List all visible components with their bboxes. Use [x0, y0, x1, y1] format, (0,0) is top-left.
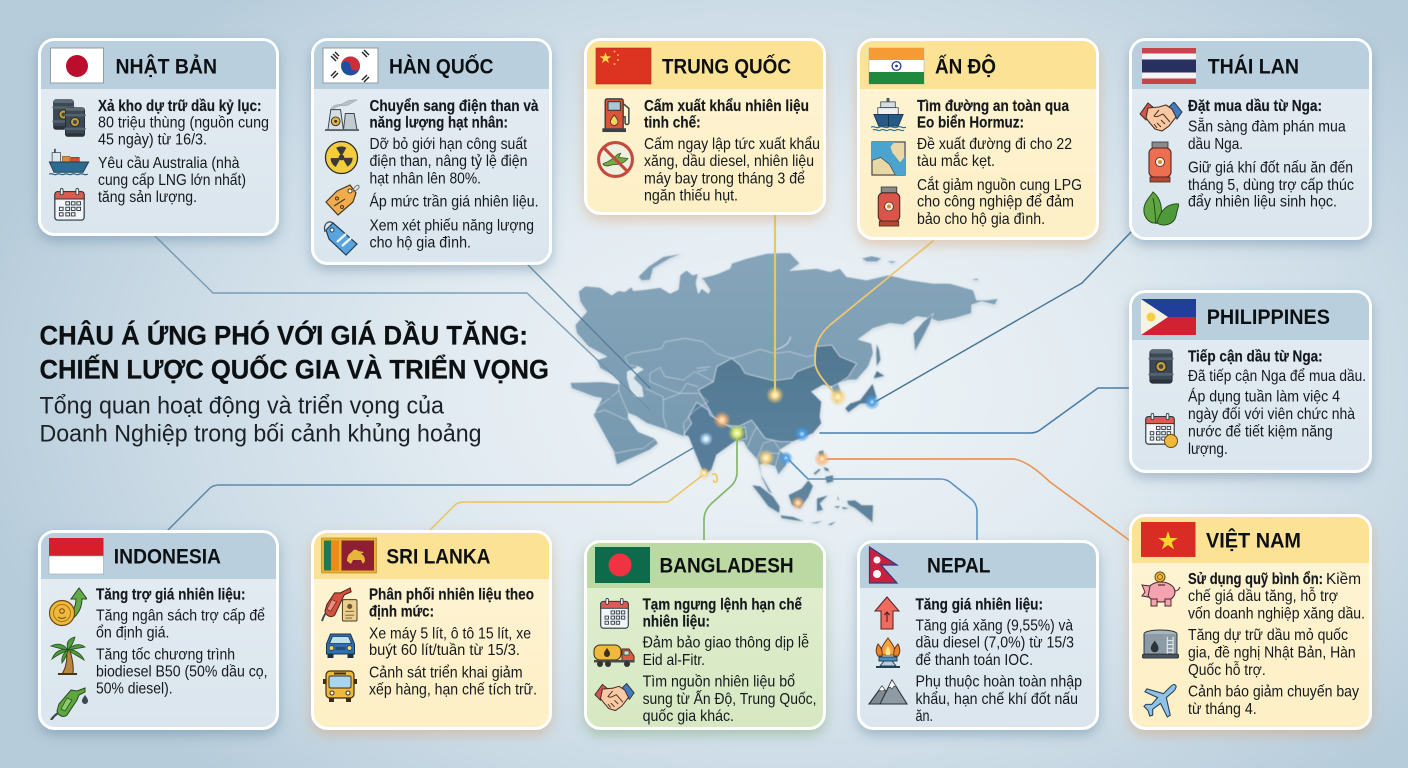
icon: car — [326, 634, 354, 658]
panel: Bangladesh — [586, 542, 824, 728]
text: Xe máy 5 lít, ô tô 15 lít, xe — [369, 625, 531, 642]
icon: palm tree — [51, 637, 85, 675]
text: Cảnh báo giảm chuyến bay — [1188, 684, 1359, 701]
panel: Việt Nam — [1130, 516, 1370, 728]
text: tàu mắc kẹt. — [917, 151, 995, 170]
icon: bus — [323, 671, 357, 702]
text: tăng sản lượng. — [98, 189, 197, 206]
text: Cấm ngay lập tức xuất khẩu — [644, 135, 820, 153]
icon: calendar — [601, 598, 628, 628]
line: Ấn Độ — [815, 241, 933, 395]
text: Sẵn sàng đàm phán mua — [1188, 117, 1346, 136]
text: Xem xét phiếu năng lượng — [370, 218, 534, 235]
icon: fuel truck — [594, 645, 634, 667]
marker: Japan — [864, 394, 880, 410]
icon: leaves — [1144, 192, 1179, 225]
marker: Indonesia — [791, 496, 805, 510]
text: Tạm ngưng lệnh hạn chế — [643, 596, 802, 613]
title: CHIẾN LƯỢC QUỐC GIA VÀ TRIỂN VỌNG — [40, 352, 549, 384]
marker: India — [699, 432, 713, 446]
text: Áp dụng tuần làm việc 4 — [1188, 387, 1340, 406]
text: hạt nhân lên 80%. — [370, 170, 481, 187]
icon: handshake — [595, 684, 634, 711]
text: nhiên liệu: — [643, 614, 710, 631]
panel: Sri Lanka — [312, 532, 550, 728]
text: Đặt mua dầu từ Nga: — [1188, 98, 1322, 115]
flag: Philippines — [1141, 299, 1196, 335]
text: ngày đối với viên chức nhà — [1188, 406, 1355, 423]
panel: Nhật Bản — [40, 40, 278, 234]
text: Đề xuất đường đi cho 22 — [917, 136, 1072, 153]
Sakhalin — [876, 343, 881, 367]
icon: nozzle and ID card — [322, 588, 357, 621]
icon: storage tank — [1142, 630, 1179, 658]
subtitle — [40, 392, 482, 448]
icon: oil barrel — [1149, 350, 1173, 383]
flag: South Korea — [323, 48, 378, 83]
text: ngăn thiếu hụt. — [644, 188, 738, 205]
icon: handshake — [1140, 102, 1182, 131]
text: quốc gia khác. — [643, 708, 734, 725]
text: buýt 60 lít/tuần từ 15/3. — [369, 642, 520, 659]
text — [1188, 98, 1354, 211]
text: tinh chế: — [644, 115, 701, 132]
line: Sri Lanka — [430, 475, 703, 530]
flag: Indonesia — [49, 538, 104, 574]
text: Áp mức trần giá nhiên liệu. — [370, 192, 538, 211]
heading: THÁI LAN — [1208, 56, 1299, 79]
text: từ tháng 4. — [1188, 701, 1257, 718]
line: Nhật Bản — [155, 236, 650, 410]
heading: PHILIPPINES — [1207, 306, 1330, 329]
title: CHÂU Á ỨNG PHÓ VỚI GIÁ DẦU TĂNG: — [40, 319, 528, 350]
heading: VIỆT NAM — [1206, 528, 1301, 552]
text: nước để tiết kiệm năng — [1188, 423, 1333, 441]
text: định mức: — [369, 604, 434, 621]
subtitle: Tổng quan hoạt động và triển vọng của — [40, 392, 445, 419]
flag: Thailand — [1142, 48, 1196, 84]
Kamchatka — [913, 313, 933, 352]
icon: oil barrels — [52, 100, 86, 136]
text: 50% diesel). — [96, 680, 173, 697]
icon: radiation — [325, 141, 358, 174]
Sulawesi — [817, 495, 828, 512]
heading: ẤN ĐỘ — [935, 55, 996, 79]
heading: HÀN QUỐC — [389, 55, 494, 79]
text: Tìm đường an toàn qua — [917, 98, 1069, 115]
marker: Hong Kong — [794, 426, 810, 442]
marker: Sri Lanka island — [712, 474, 717, 482]
text: cho hộ gia đình. — [370, 234, 471, 251]
text: máy bay trong tháng 3 để — [644, 169, 805, 187]
line: Hàn Quốc — [528, 265, 650, 388]
text: khẩu, hạn chế khí đốt nấu — [916, 690, 1078, 708]
flag: India — [869, 48, 924, 84]
Arctic islands — [862, 256, 979, 281]
subtitle: Doanh Nghiệp trong bối cảnh khủng hoảng — [40, 421, 482, 448]
Novaya Zemlya — [638, 253, 683, 281]
heading: NEPAL — [927, 555, 991, 578]
country borders — [593, 338, 815, 467]
text — [369, 586, 537, 698]
marker: Vietnam — [779, 451, 793, 465]
icon: mountains — [869, 680, 907, 704]
text: lượng. — [1188, 441, 1228, 458]
text: 45 ngày) từ 16/3. — [98, 131, 207, 148]
China highlight — [698, 345, 857, 442]
text: Phân phối nhiên liệu theo — [369, 586, 534, 603]
text: Cảnh sát triển khai giảm — [369, 663, 523, 681]
icon: gas cylinder — [1149, 142, 1171, 182]
panel: Indonesia — [40, 532, 278, 728]
line: Việt Nam — [824, 459, 1129, 540]
marker: Sri Lanka — [698, 467, 710, 479]
text: Xả kho dự trữ dầu kỷ lục: — [98, 98, 262, 115]
flag: Japan — [50, 48, 104, 83]
Borneo — [788, 480, 813, 508]
text: Tiếp cận dầu từ Nga: — [1188, 349, 1323, 366]
text: Quốc hỗ trợ. — [1188, 660, 1266, 679]
heading: BANGLADESH — [660, 555, 794, 578]
icon: power plant — [325, 100, 359, 131]
icon: piggy bank — [1142, 572, 1180, 606]
icon: calendar with coin — [1146, 413, 1178, 448]
line: Philippines — [820, 388, 1129, 433]
marker: Bangladesh — [728, 424, 746, 442]
marker: Nepal — [713, 411, 731, 429]
Japan — [845, 371, 885, 413]
icon: price up arrow — [875, 597, 899, 629]
text: đẩy nhiên liệu sinh học. — [1188, 193, 1337, 211]
text: năng lượng hạt nhân: — [370, 115, 508, 132]
text: cho công nghiệp để đảm — [917, 193, 1074, 211]
text: Tăng giá xăng (9,55%) và — [916, 618, 1073, 635]
text — [1188, 570, 1365, 718]
flag: Sri Lanka — [322, 538, 376, 573]
marker: Philippines — [814, 451, 830, 467]
text — [917, 98, 1082, 228]
icon: fuel pump — [602, 99, 629, 132]
text — [643, 596, 816, 725]
icon: gas cylinder — [878, 187, 900, 226]
text: Tăng ngân sách trợ cấp để — [96, 607, 265, 625]
text: biodiesel B50 (50% dầu cọ, — [96, 664, 268, 681]
heading: INDONESIA — [114, 545, 221, 568]
text: Đảm bảo giao thông dịp lễ — [643, 633, 809, 652]
panel: Thái Lan — [1130, 40, 1370, 238]
text: Eo biển Hormuz: — [917, 114, 1024, 132]
Philippines — [813, 450, 833, 483]
marker: Korea — [829, 388, 847, 406]
text: cung cấp LNG lớn nhất) — [98, 172, 246, 189]
text: Sử dụng quỹ bình ổn: — [1188, 570, 1323, 588]
Sumatra — [752, 485, 780, 513]
text: xếp hàng, hạn chế tích trữ. — [369, 681, 537, 698]
Papua — [847, 500, 873, 523]
map location markers — [698, 386, 880, 510]
panel: Philippines — [1130, 292, 1370, 472]
flag: Vietnam — [1141, 522, 1196, 557]
text: Giữ giá khí đốt nấu ăn đến — [1188, 159, 1353, 176]
landmass — [570, 253, 998, 495]
text: Cấm xuất khẩu nhiên liệu — [644, 97, 809, 115]
text: tháng 5, dùng trợ cấp thúc — [1188, 177, 1354, 194]
map of Asia — [570, 253, 998, 525]
icon: calendar — [55, 188, 84, 220]
text: sung từ Ấn Độ, Trung Quốc, — [643, 689, 816, 708]
line: Nepal — [787, 458, 977, 540]
text: điện than, nâng tỷ lệ điện — [370, 153, 528, 170]
panel: Hàn Quốc — [312, 40, 550, 264]
text — [98, 98, 269, 206]
marker: China — [766, 386, 784, 404]
text: Tăng trợ giá nhiên liệu: — [96, 586, 246, 603]
line: Trung Quốc — [774, 215, 776, 392]
heading: TRUNG QUỐC — [662, 55, 791, 79]
marker: Thailand — [757, 449, 775, 467]
connector lines — [155, 215, 1131, 540]
text: chế giá dầu tăng, hỗ trợ — [1188, 586, 1338, 605]
flag: Bangladesh — [595, 547, 650, 583]
icon: gas burner — [876, 638, 900, 668]
text: bảo cho hộ gia đình. — [917, 211, 1045, 228]
icon: subsidy coin — [50, 588, 87, 626]
icon: voucher tag — [325, 222, 357, 255]
India highlight — [683, 402, 747, 476]
line: Indonesia — [168, 448, 693, 530]
small islands — [808, 495, 850, 525]
text: xăng, dầu diesel, nhiên liệu — [644, 153, 814, 170]
line: Bangladesh — [704, 435, 737, 540]
text — [916, 596, 1082, 725]
text: ăn. — [916, 708, 933, 725]
text: dầu Nga. — [1188, 136, 1243, 153]
panel: Nepal — [858, 542, 1098, 728]
text: Cắt giảm nguồn cung LPG — [917, 175, 1082, 194]
text — [370, 97, 539, 251]
text: ổn định giá. — [96, 623, 170, 641]
text: Phụ thuộc hoàn toàn nhập — [916, 674, 1082, 691]
text: gia, đề nghị Nhật Bản, Hàn — [1188, 644, 1356, 661]
heading: SRI LANKA — [386, 545, 490, 568]
flag: China — [596, 48, 651, 84]
text: Tăng tốc chương trình — [96, 646, 235, 663]
icon: price tag — [326, 185, 359, 215]
text: dầu diesel (7,0%) từ 15/3 — [916, 635, 1074, 652]
text: Chuyển sang điện than và — [370, 97, 539, 115]
text: Kiềm — [1326, 571, 1361, 588]
icon: export ban — [598, 142, 633, 177]
title — [40, 319, 549, 384]
Java — [780, 515, 805, 522]
panel: Trung Quốc — [586, 40, 824, 214]
Caspian sea — [627, 367, 643, 397]
text: Đã tiếp cận Nga để mua dầu. — [1188, 367, 1366, 385]
icon: cargo ship — [49, 149, 89, 175]
text: Dỡ bỏ giới hạn công suất — [370, 136, 527, 153]
panel: Ấn Độ — [858, 40, 1098, 238]
text — [644, 97, 820, 205]
text — [1188, 349, 1366, 458]
text: Tìm nguồn nhiên liệu bổ — [643, 673, 795, 691]
flag: China: ★ — [600, 51, 612, 65]
icon: fuel nozzle — [51, 688, 88, 720]
heading: NHẬT BẢN — [116, 55, 217, 79]
text — [96, 586, 268, 697]
text: để thanh toán IOC. — [916, 651, 1033, 669]
flag: Nepal — [870, 547, 897, 583]
icon: ship — [871, 98, 906, 131]
lake Baikal — [777, 337, 791, 349]
text: Tăng dự trữ dầu mỏ quốc — [1188, 627, 1348, 644]
icon: airplane — [1144, 685, 1176, 717]
text: Tăng giá nhiên liệu: — [916, 596, 1043, 613]
text: Yêu cầu Australia (nhà — [98, 155, 240, 172]
text: Eid al-Fitr. — [643, 652, 705, 669]
text: 80 triệu thùng (nguồn cung — [98, 115, 269, 132]
text: vốn doanh nghiệp xăng dầu. — [1188, 605, 1365, 622]
icon: sea map — [872, 142, 905, 175]
line: Thái Lan — [875, 232, 1131, 402]
